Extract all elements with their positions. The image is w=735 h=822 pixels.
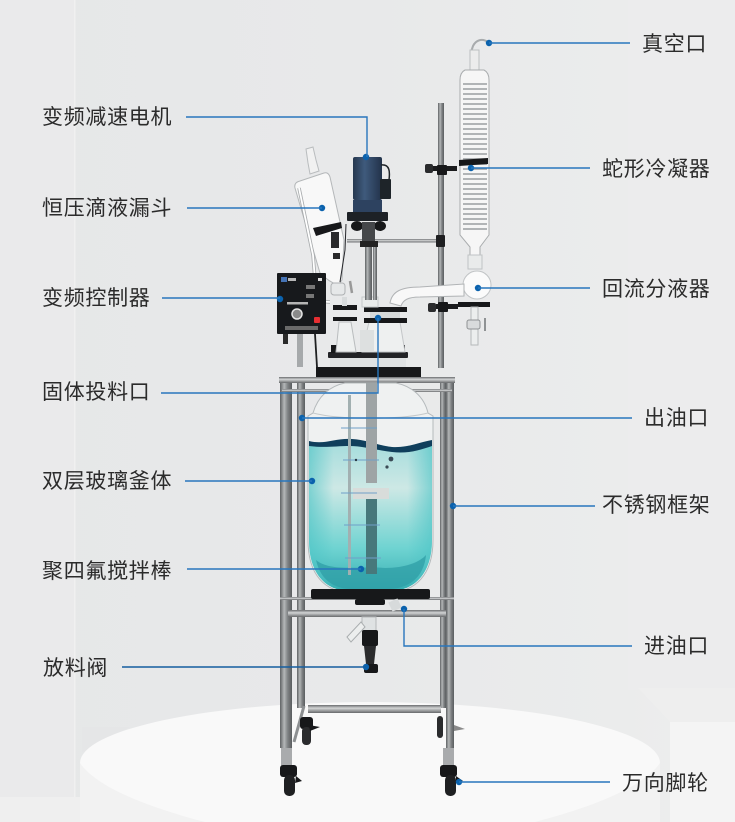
condenser with coil [425,40,489,255]
label: 蛇形冷凝器 [468,158,710,181]
label: 真空口: 真空口 [642,33,707,56]
label: 聚四氟搅拌棒: 聚四氟搅拌棒 [42,560,172,583]
label: 放料阀 [43,657,369,680]
label: 万向脚轮 [456,772,709,795]
control box [277,273,326,367]
label: 固体投料口 [42,315,381,404]
reflux separator [390,255,491,345]
casters [280,716,465,796]
vessel bottom clamp [311,589,430,612]
label: 出油口 [299,407,709,430]
label: 变频控制器: 变频控制器 [42,287,150,310]
dropping funnel [295,147,352,302]
label: 真空口 [486,33,707,56]
motor [347,157,391,247]
frame: stainless steel [279,377,455,766]
label: 万向脚轮: 万向脚轮 [622,772,709,795]
label: 出油口: 出油口 [644,407,709,430]
label: 变频控制器 [42,287,283,310]
label: 变频减速电机 [42,106,369,160]
label: 双层玻璃釜体 [42,470,315,493]
support rod and crossbar [347,103,445,368]
label: 放料阀: 放料阀 [43,657,108,680]
stirrer shaft [365,240,377,300]
label: 恒压滴液漏斗 [42,197,325,220]
label: 不锈钢框架 [450,494,710,517]
label: 双层玻璃釜体: 双层玻璃釜体 [42,470,172,493]
label: 回流分液器 [475,278,710,301]
label: 进油口 [401,606,709,658]
discharge valve [347,617,378,673]
label: 变频减速电机: 变频减速电机 [42,106,172,129]
label: 回流分液器: 回流分液器 [602,278,710,301]
vessel: double-layer glass with liquid [308,383,433,592]
label: 固体投料口: 固体投料口 [42,381,150,404]
label: 蛇形冷凝器: 蛇形冷凝器 [602,158,710,181]
label: 聚四氟搅拌棒 [42,560,364,583]
label: 不锈钢框架: 不锈钢框架 [602,494,710,517]
label: 进油口: 进油口 [644,635,709,658]
top flange [316,297,421,377]
label: 恒压滴液漏斗: 恒压滴液漏斗 [42,197,172,220]
